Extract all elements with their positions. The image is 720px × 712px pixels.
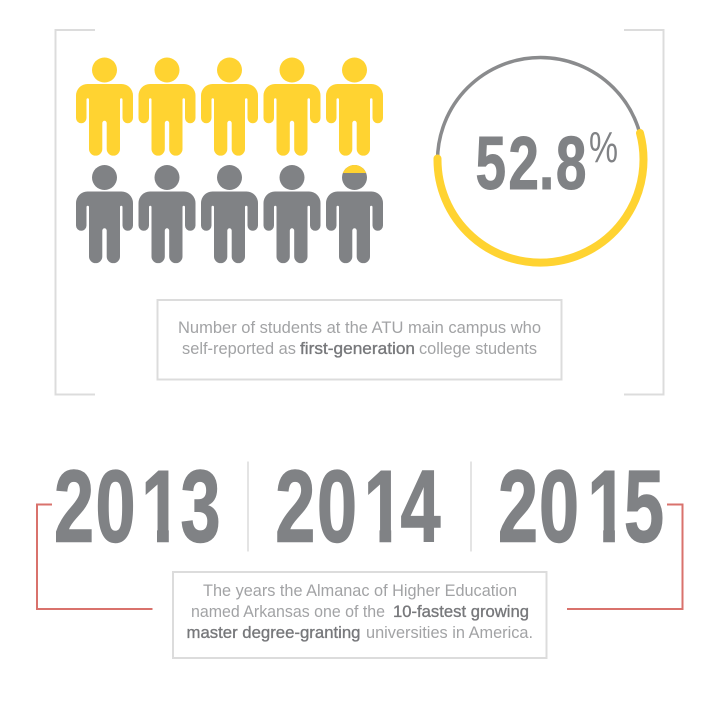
year: 2013: 2013 (54, 449, 221, 563)
year: 2015: 2015 (498, 449, 664, 563)
donut chart: 52.8 percent (437, 58, 644, 264)
pictogram: grey people row (76, 165, 383, 263)
left red bracket (37, 504, 152, 609)
left frame bracket (56, 30, 95, 394)
caption box: first-generation: self-reported as (182, 339, 296, 358)
right frame bracket (624, 30, 664, 394)
caption box: almanac ranking: named Arkansas one of the (191, 602, 385, 621)
caption box: almanac ranking: master degree-granting (186, 623, 360, 642)
caption box: almanac ranking: 10-fastest growing (393, 602, 529, 621)
caption box: first-generation (158, 300, 562, 380)
caption box: first-generation: college students (419, 339, 537, 358)
right red bracket (567, 504, 682, 609)
caption box: almanac ranking (173, 572, 546, 658)
caption box: almanac ranking: universities in America. (366, 623, 533, 642)
panel: first-generation students (56, 30, 664, 394)
pictogram: yellow people row (76, 58, 383, 156)
caption box: first-generation: Number of students at the ATU main campus who (178, 318, 541, 337)
caption box: almanac ranking: The years the Almanac of Higher Education (203, 581, 517, 600)
icon: partially filled yellow head (343, 165, 366, 173)
caption box: first-generation: first-generation (300, 339, 415, 358)
panel: fastest growing years (37, 449, 682, 658)
year: 2014: 2014 (275, 449, 441, 563)
statistic: 52.8%: 52.8 (475, 121, 586, 205)
statistic: 52.8%: % (589, 123, 618, 172)
